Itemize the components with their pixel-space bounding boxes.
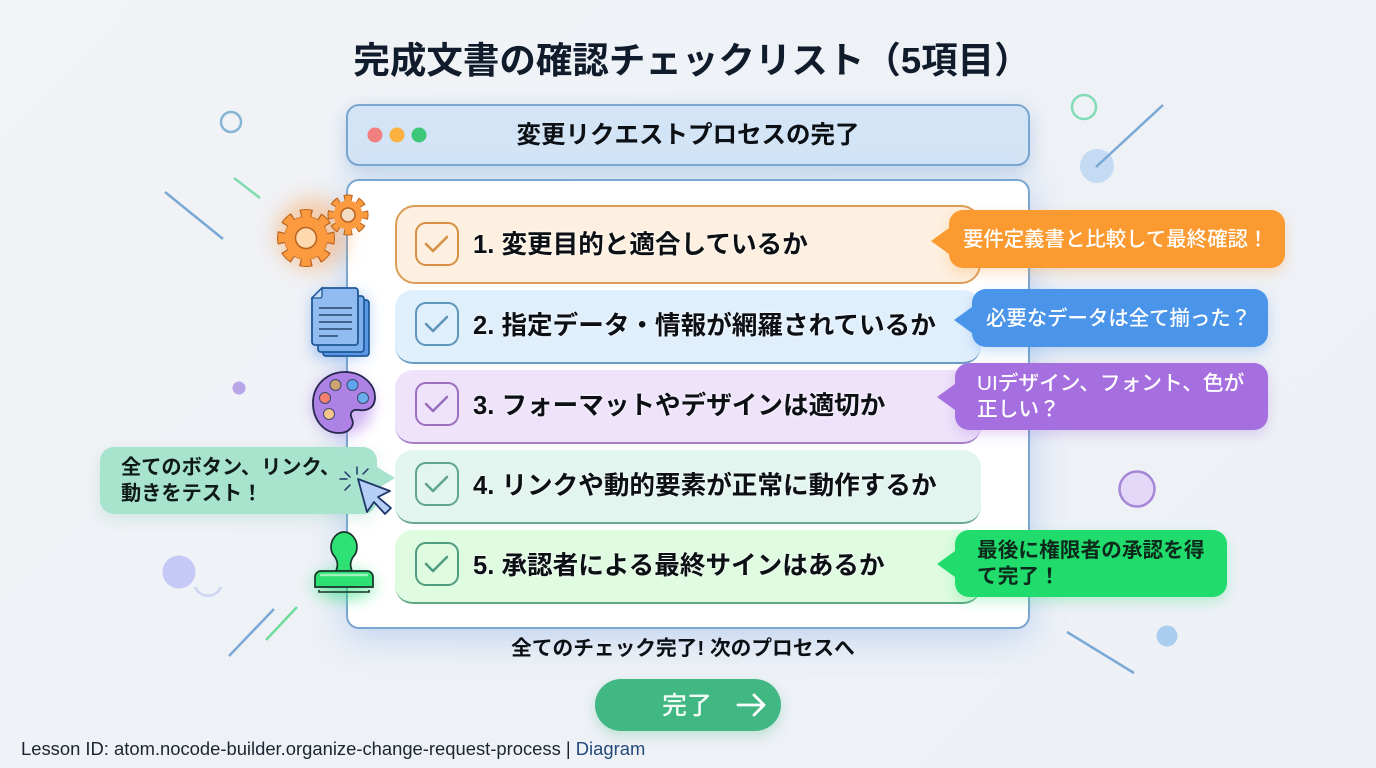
button label: 完了 [662, 692, 712, 720]
callout: requirements [949, 210, 1285, 268]
item 3 text: 3. フォーマットやデザインは適切か [473, 392, 885, 420]
checkbox 1 [415, 222, 459, 266]
checklist row 1 [395, 205, 981, 284]
checklist row 3 [395, 370, 981, 444]
callout: data [972, 289, 1268, 347]
icon: arrow [736, 694, 766, 716]
callout: link test: 動きをテスト！ [121, 483, 262, 505]
item 1 text: 1. 変更目的と適合しているか [473, 231, 808, 259]
item 5 text: 5. 承認者による最終サインはあるか [473, 552, 885, 580]
item 2 text: 2. 指定データ・情報が網羅されているか [473, 312, 936, 340]
icon: palette [306, 368, 380, 442]
checklist row 5 [395, 530, 981, 604]
callout: design: 正しい？ [977, 398, 1060, 421]
checklist card [346, 179, 1030, 629]
window control dots [368, 128, 426, 142]
icon: approval stamp [304, 531, 384, 610]
callout: link test [100, 447, 377, 514]
callout: data: 必要なデータは全て揃った？ [986, 308, 1251, 330]
icon: document stack [304, 286, 376, 366]
checkbox 4 [415, 462, 459, 506]
icon: gears [265, 187, 368, 280]
callout: link test: 全てのボタン、リンク、 [121, 457, 340, 479]
title: 完成文書の確認チェックリスト（5項目） [353, 40, 1031, 81]
callout: approval: て完了！ [977, 565, 1060, 588]
checklist row 2 [395, 290, 981, 364]
done button [595, 679, 781, 731]
callout: requirements: 要件定義書と比較して最終確認！ [963, 229, 1268, 251]
checkbox 3 [415, 382, 459, 426]
callout: design [955, 363, 1268, 430]
callout: approval [955, 530, 1227, 597]
checkbox 2 [415, 302, 459, 346]
footer lesson id: Lesson ID: atom.nocode-builder.organize-change-request-process | Diagram [21, 738, 645, 759]
window header bar [346, 104, 1030, 166]
icon: cursor with click sparks [339, 466, 392, 515]
completion message: 全てのチェック完了! 次のプロセスへ [511, 637, 855, 660]
callout: design: UIデザイン、フォント、色が [977, 372, 1244, 395]
checklist row 4 [395, 450, 981, 524]
item 4 text: 4. リンクや動的要素が正常に動作するか [473, 472, 937, 500]
callout: approval: 最後に権限者の承認を得 [977, 539, 1205, 562]
checkbox 5 [415, 542, 459, 586]
header title: 変更リクエストプロセスの完了 [516, 122, 860, 149]
